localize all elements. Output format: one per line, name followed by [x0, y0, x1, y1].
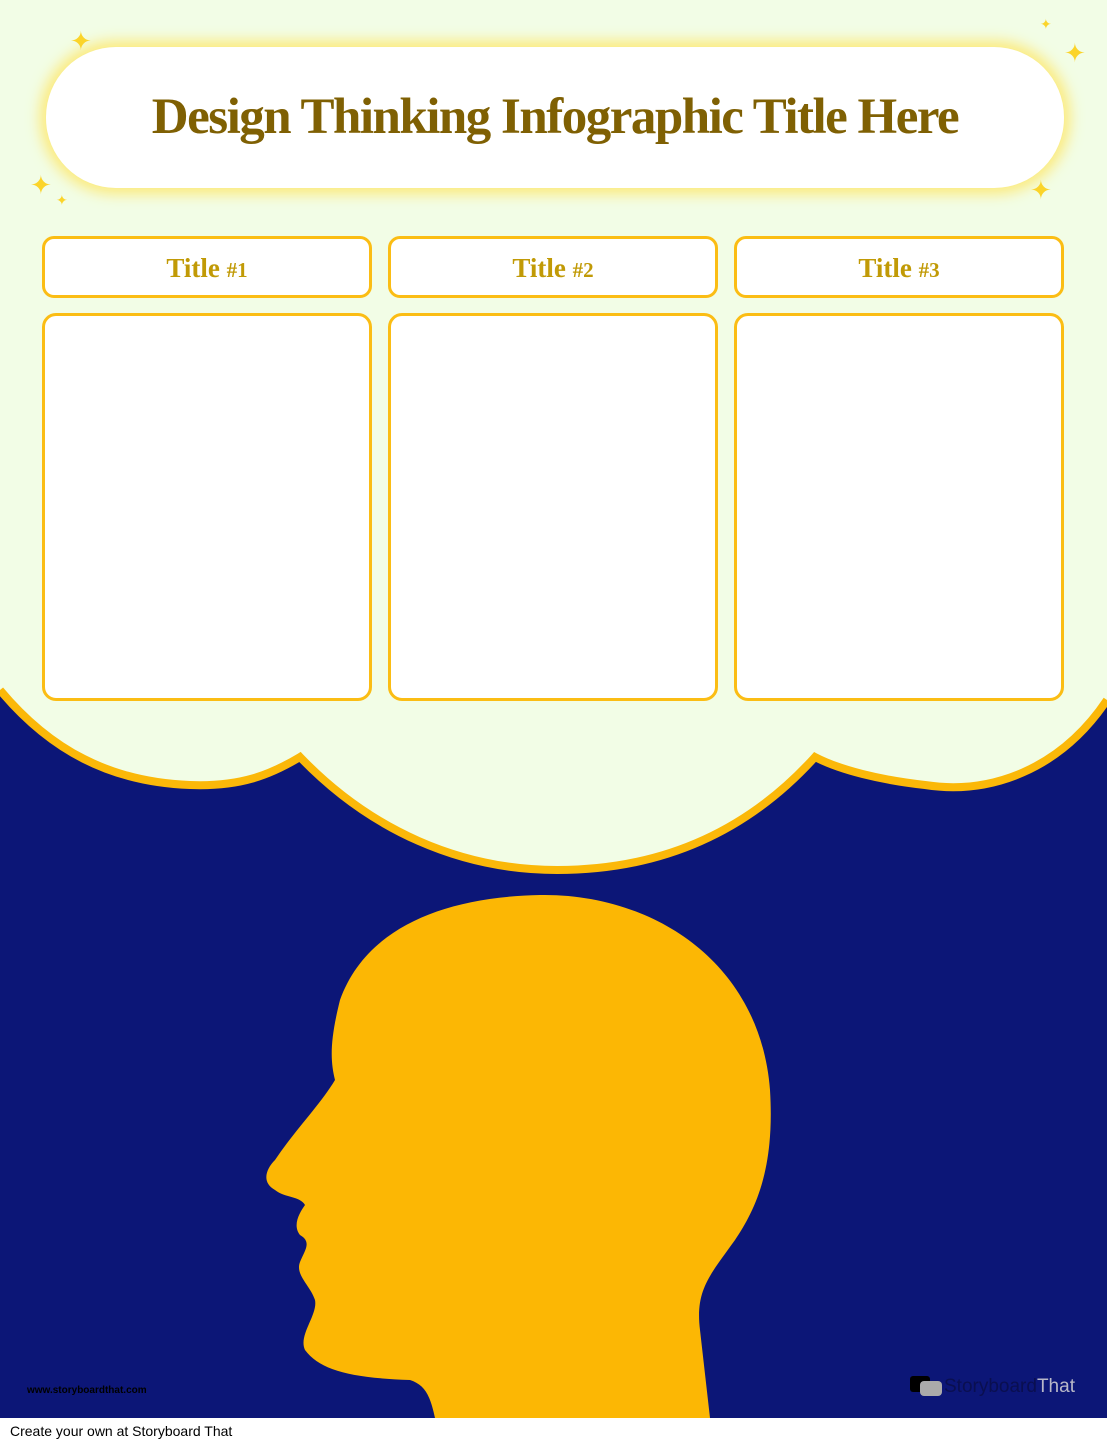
header: Title #1 [42, 236, 372, 298]
sparkles: ✦ [70, 26, 92, 56]
cloud [0, 0, 1107, 870]
header: Title #2 [388, 236, 718, 298]
header: Title #2: Title #2 [512, 253, 594, 283]
sparkles: ✦ [1030, 175, 1052, 205]
footer credit: Create your own at Storyboard That [10, 1423, 232, 1439]
title banner: Design Thinking Infographic Title Here [152, 89, 958, 145]
sparkles: ✦ [1040, 16, 1052, 32]
sparkles: ✦ [1064, 38, 1086, 68]
panel: box 2 [388, 313, 718, 701]
header: Title #3 [734, 236, 1064, 298]
title banner [46, 47, 1064, 188]
panel: box 3 [734, 313, 1064, 701]
header: Title #3: Title #3 [858, 253, 940, 283]
header: Title #1: Title #1 [166, 253, 248, 283]
panel: box 1 [42, 313, 372, 701]
sparkles: ✦ [30, 170, 52, 200]
icon: head silhouette [266, 895, 771, 1418]
footer url: www.storyboardthat.com [27, 1385, 147, 1396]
sparkles: ✦ [56, 192, 68, 208]
sparkles [30, 16, 1086, 208]
logo: StoryboardThat [944, 1376, 1075, 1397]
